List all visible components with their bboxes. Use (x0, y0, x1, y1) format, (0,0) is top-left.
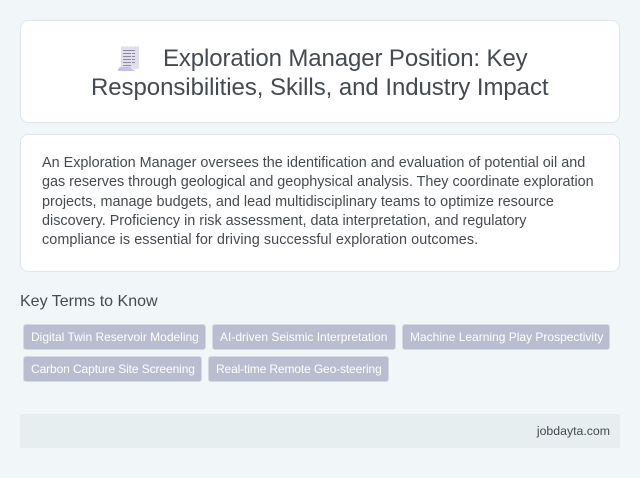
tag (23, 324, 206, 350)
title line 1: Exploration Manager Position: Key (163, 45, 528, 72)
description text: An Exploration Manager oversees the identification and evaluation of potential oil and (42, 155, 585, 171)
description text (42, 155, 594, 248)
tag: Digital Twin Reservoir Modeling (31, 330, 199, 344)
tag: Machine Learning Play Prospectivity (410, 330, 603, 344)
panel: title card (20, 20, 620, 123)
tag list (23, 324, 610, 382)
footer text: jobdayta.com (537, 424, 610, 438)
tag (402, 324, 610, 350)
description text: compliance is essential for driving successful exploration outcomes. (42, 232, 478, 248)
tag (23, 356, 202, 382)
description text: gas reserves through geological and geophysical analysis. They coordinate exploration (42, 174, 594, 190)
icon: paper scroll (118, 46, 139, 71)
tag: Real-time Remote Geo-steering (216, 362, 382, 376)
tag (208, 356, 389, 382)
panel: description card (20, 134, 620, 272)
tag (212, 324, 396, 350)
heading: key terms: Key Terms to Know (20, 293, 158, 310)
tag: Carbon Capture Site Screening (31, 362, 195, 376)
tag: AI-driven Seismic Interpretation (220, 330, 387, 344)
description text: projects, manage budgets, and lead multidisciplinary teams to optimize resource (42, 194, 554, 210)
title line 2: Responsibilities, Skills, and Industry Impact (91, 74, 548, 101)
description text: discovery. Proficiency in risk assessment, data interpretation, and regulatory (42, 213, 526, 229)
footer bar (20, 414, 620, 448)
